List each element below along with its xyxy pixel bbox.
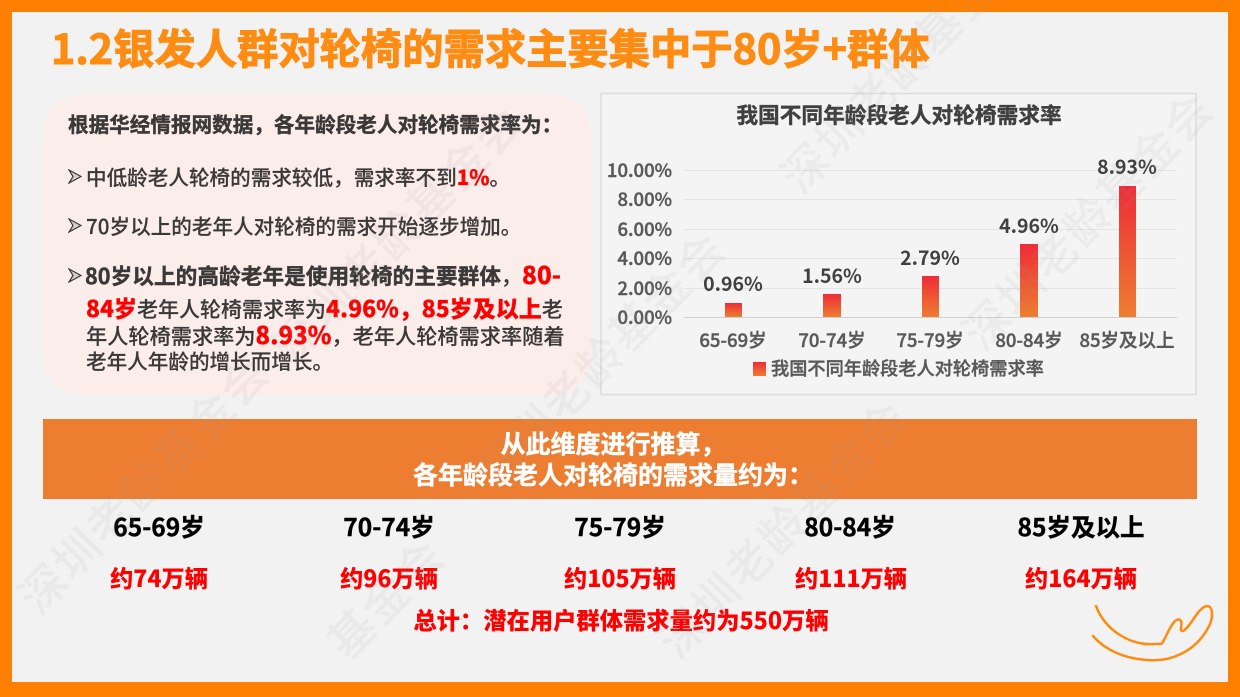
age group 80-84 estimate	[795, 509, 907, 594]
total demand: 总计：潜在用户群体需求量约为550万辆	[413, 602, 829, 636]
age group 85+ estimate: 约164万辆	[1025, 560, 1137, 594]
age group 75-79 estimate: 75-79岁	[574, 509, 666, 544]
bullet: low demand: 中低龄老人轮椅的需求较低，需求率不到1%。	[86, 161, 510, 191]
banner: estimate heading: 从此维度进行推算，	[500, 425, 726, 461]
y axis labels: 6.00%	[617, 216, 672, 242]
title: 1.2银发人群对轮椅的需求主要集中于80岁+群体	[51, 16, 930, 76]
bar value labels: 0.96%	[703, 268, 763, 297]
age group 70-74 estimate: 约96万辆	[340, 560, 438, 594]
watermarks: 深圳老龄基金会	[458, 215, 739, 503]
age group 65-69 estimate: 约74万辆	[110, 560, 208, 594]
x axis labels	[699, 327, 1175, 353]
age group 85+ estimate	[1018, 509, 1144, 594]
age group 70-74 estimate	[340, 509, 438, 594]
bars	[725, 186, 1136, 317]
x axis labels: 85岁及以上	[1079, 327, 1175, 353]
bullet: 80+ main group: 老年人年龄的增长而增长。	[86, 345, 333, 375]
age group 80-84 estimate: 约111万辆	[795, 560, 907, 594]
chart title: 我国不同年龄段老人对轮椅需求率	[736, 99, 1062, 130]
panel: text summary	[43, 95, 591, 395]
watermarks: 深圳老龄基金会	[946, 75, 1227, 363]
age group 65-69 estimate	[110, 509, 208, 594]
watermarks: 深圳老龄基金会	[2, 339, 283, 627]
y axis labels: 0.00%	[617, 304, 672, 330]
age group 70-74 estimate: 70-74岁	[343, 509, 435, 544]
bar value labels	[703, 151, 1157, 297]
icon: orange swoosh	[1092, 604, 1214, 662]
chart legend: 我国不同年龄段老人对轮椅需求率	[771, 355, 1044, 381]
bullet: 80+ main group: 80岁以上的高龄老年是使用轮椅的主要群体，80-	[85, 257, 561, 292]
watermarks: 深圳老龄基金会	[256, 88, 537, 376]
x axis labels: 80-84岁	[995, 327, 1063, 353]
age group 75-79 estimate: 约105万辆	[564, 560, 676, 594]
y axis labels	[607, 157, 672, 330]
x axis labels: 70-74岁	[798, 327, 866, 353]
bar value labels: 4.96%	[999, 210, 1059, 239]
age group 65-69 estimate: 65-69岁	[113, 509, 205, 544]
bullet: 70+ demand: 70岁以上的老年人对轮椅的需求开始逐步增加。	[86, 210, 521, 240]
y axis labels: 8.00%	[617, 186, 672, 212]
x axis labels: 65-69岁	[699, 327, 767, 353]
summary lead sentence: 根据华经情报网数据，各年龄段老人对轮椅需求率为：	[68, 108, 562, 138]
bullet: 80+ main group: 年人轮椅需求率为8.93%，老年人轮椅需求率随着	[86, 316, 565, 351]
bullet: 80+ main group: 84岁老年人轮椅需求率为4.96%，85岁及以上老	[86, 290, 563, 324]
bullet: 80+ main group	[68, 257, 565, 375]
y axis labels: 4.00%	[617, 245, 672, 271]
age group 75-79 estimate	[564, 509, 676, 594]
banner: estimate heading	[43, 419, 1197, 499]
banner: estimate heading: 各年龄段老人对轮椅的需求量约为：	[413, 456, 813, 492]
x axis labels: 75-79岁	[896, 327, 964, 353]
bar value labels: 1.56%	[802, 260, 862, 289]
watermarks: 基金会	[311, 522, 458, 672]
bar value labels: 8.93%	[1097, 151, 1157, 180]
watermarks: 深圳老龄基金会	[641, 383, 922, 671]
chart frame	[601, 94, 1196, 394]
bar value labels: 2.79%	[900, 242, 960, 271]
y axis labels: 2.00%	[617, 275, 672, 301]
age group 80-84 estimate: 80-84岁	[804, 509, 896, 544]
y axis labels: 10.00%	[607, 157, 672, 183]
age group 85+ estimate: 85岁及以上	[1018, 509, 1144, 544]
